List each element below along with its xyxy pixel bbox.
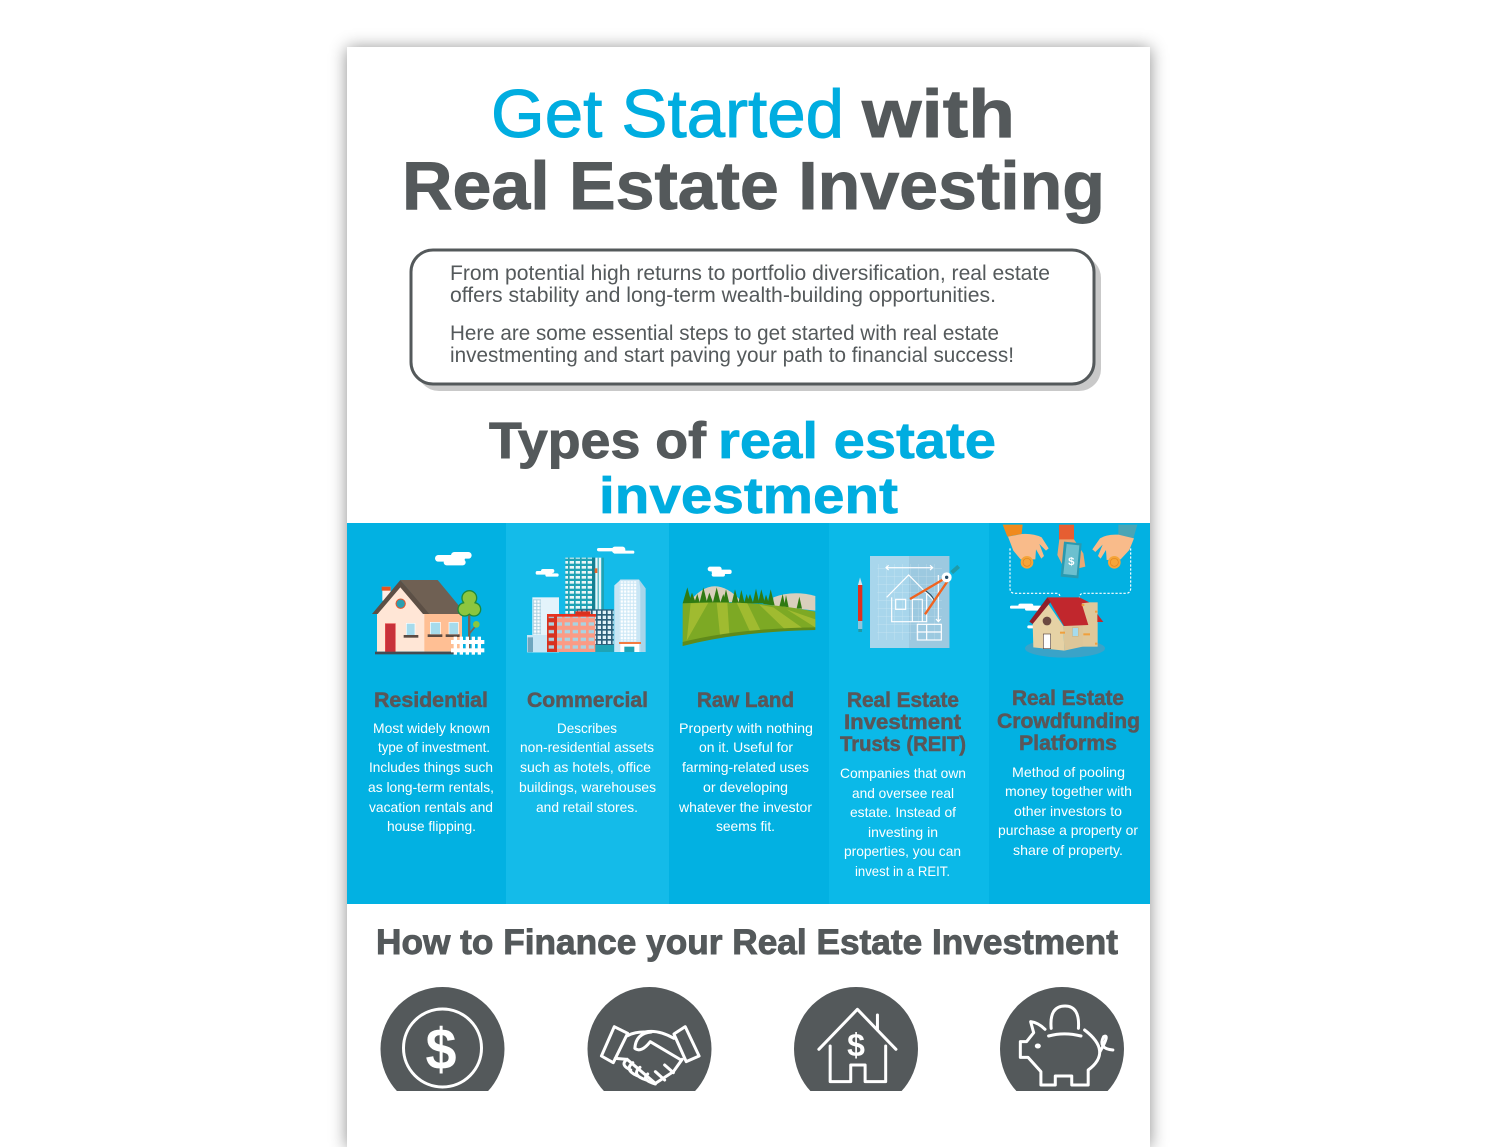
heading: commercial: Commercial bbox=[527, 689, 648, 712]
heading: crowdfunding: Crowdfunding bbox=[997, 710, 1140, 733]
icon: dollar coin bbox=[380, 987, 504, 1111]
title: Real Estate Investing bbox=[402, 148, 1105, 224]
text: raw land description: Property with nothing bbox=[679, 720, 813, 736]
intro callout box: Here are some essential steps to get started with real estate bbox=[450, 322, 999, 345]
text: raw land description: or developing bbox=[703, 779, 788, 795]
title: Get Started bbox=[491, 76, 844, 152]
heading: REIT bbox=[840, 689, 966, 756]
text: REIT description: Companies that own bbox=[840, 765, 966, 781]
icon: hands pooling money for a house bbox=[1003, 525, 1137, 658]
text: REIT description: invest in a REIT. bbox=[855, 863, 950, 879]
text: residential description: type of investment. bbox=[378, 739, 490, 755]
text: residential description: house flipping. bbox=[387, 818, 476, 834]
intro callout box: offers stability and long-term wealth-building opportunities. bbox=[450, 284, 996, 307]
text: REIT description: investing in bbox=[868, 824, 938, 840]
icon: house with dollar sign: $ bbox=[847, 1027, 865, 1063]
text: REIT description: properties, you can bbox=[844, 843, 961, 859]
heading: REIT: Investment bbox=[844, 711, 961, 734]
intro callout box: investmenting and start paving your path to financial success! bbox=[450, 344, 1014, 367]
icon: handshake bbox=[588, 987, 712, 1111]
section heading: types: Types of bbox=[489, 412, 707, 469]
heading: raw land: Raw Land bbox=[697, 689, 794, 712]
text: crowdfunding description bbox=[998, 764, 1138, 858]
section heading: types: real estate bbox=[718, 412, 996, 469]
text: residential description bbox=[368, 720, 494, 834]
panel: raw land bbox=[678, 567, 815, 834]
intro callout box: From potential high returns to portfolio diversification, real estate bbox=[450, 262, 1050, 285]
heading: REIT: Real Estate bbox=[847, 689, 959, 712]
title: with bbox=[861, 76, 1015, 152]
text: REIT description bbox=[840, 765, 966, 879]
panel: residential bbox=[368, 552, 494, 834]
icon: city buildings bbox=[527, 547, 646, 652]
blue band of investment types bbox=[347, 523, 1150, 904]
heading: residential: Residential bbox=[374, 689, 488, 712]
icon: hands pooling money for a house: $ bbox=[1068, 556, 1075, 568]
icon: green field bbox=[683, 567, 815, 646]
panel: crowdfunding bbox=[997, 525, 1140, 858]
intro callout box bbox=[411, 250, 1101, 391]
text: REIT description: and oversee real bbox=[852, 785, 954, 801]
panel: REIT bbox=[840, 556, 966, 879]
section heading: types: investment bbox=[599, 467, 898, 524]
text: residential description: vacation rentals and bbox=[369, 799, 493, 815]
panel: commercial bbox=[519, 547, 656, 815]
text: commercial description: non-residential assets bbox=[520, 739, 654, 755]
text: residential description: as long-term rentals, bbox=[368, 779, 494, 795]
heading: crowdfunding: Real Estate bbox=[1012, 687, 1124, 710]
text: crowdfunding description: purchase a property or bbox=[998, 822, 1138, 838]
text: commercial description: and retail stores. bbox=[536, 799, 638, 815]
icon: piggy bank bbox=[1000, 987, 1124, 1111]
section heading: finance: How to Finance your Real Estate Investment bbox=[376, 923, 1118, 962]
text: crowdfunding description: share of property. bbox=[1013, 842, 1123, 858]
text: residential description: Most widely known bbox=[373, 720, 490, 736]
section heading: types bbox=[489, 412, 996, 524]
text: raw land description: on it. Useful for bbox=[699, 739, 793, 755]
text: crowdfunding description: other investors to bbox=[1014, 803, 1122, 819]
text: REIT description: estate. Instead of bbox=[850, 804, 956, 820]
heading: crowdfunding bbox=[997, 687, 1140, 755]
text: residential description: Includes things such bbox=[369, 759, 493, 775]
text: commercial description: buildings, warehouses bbox=[519, 779, 656, 795]
text: commercial description: such as hotels, office bbox=[520, 759, 651, 775]
text: commercial description bbox=[519, 720, 656, 815]
icon: house with dollar sign bbox=[794, 987, 918, 1111]
icon: blueprint and compass bbox=[858, 556, 959, 648]
text: raw land description: farming-related uses bbox=[682, 759, 809, 775]
heading: REIT: Trusts (REIT) bbox=[840, 733, 966, 756]
icon: house bbox=[372, 552, 484, 655]
text: crowdfunding description: Method of pooling bbox=[1012, 764, 1125, 780]
icon: dollar coin: $ bbox=[426, 1017, 456, 1082]
title bbox=[402, 76, 1105, 224]
text: commercial description: Describes bbox=[557, 720, 617, 736]
text: raw land description: whatever the investor bbox=[678, 799, 812, 815]
heading: crowdfunding: Platforms bbox=[1019, 732, 1117, 755]
text: raw land description bbox=[678, 720, 813, 834]
text: crowdfunding description: money together with bbox=[1005, 783, 1132, 799]
text: raw land description: seems fit. bbox=[716, 818, 775, 834]
